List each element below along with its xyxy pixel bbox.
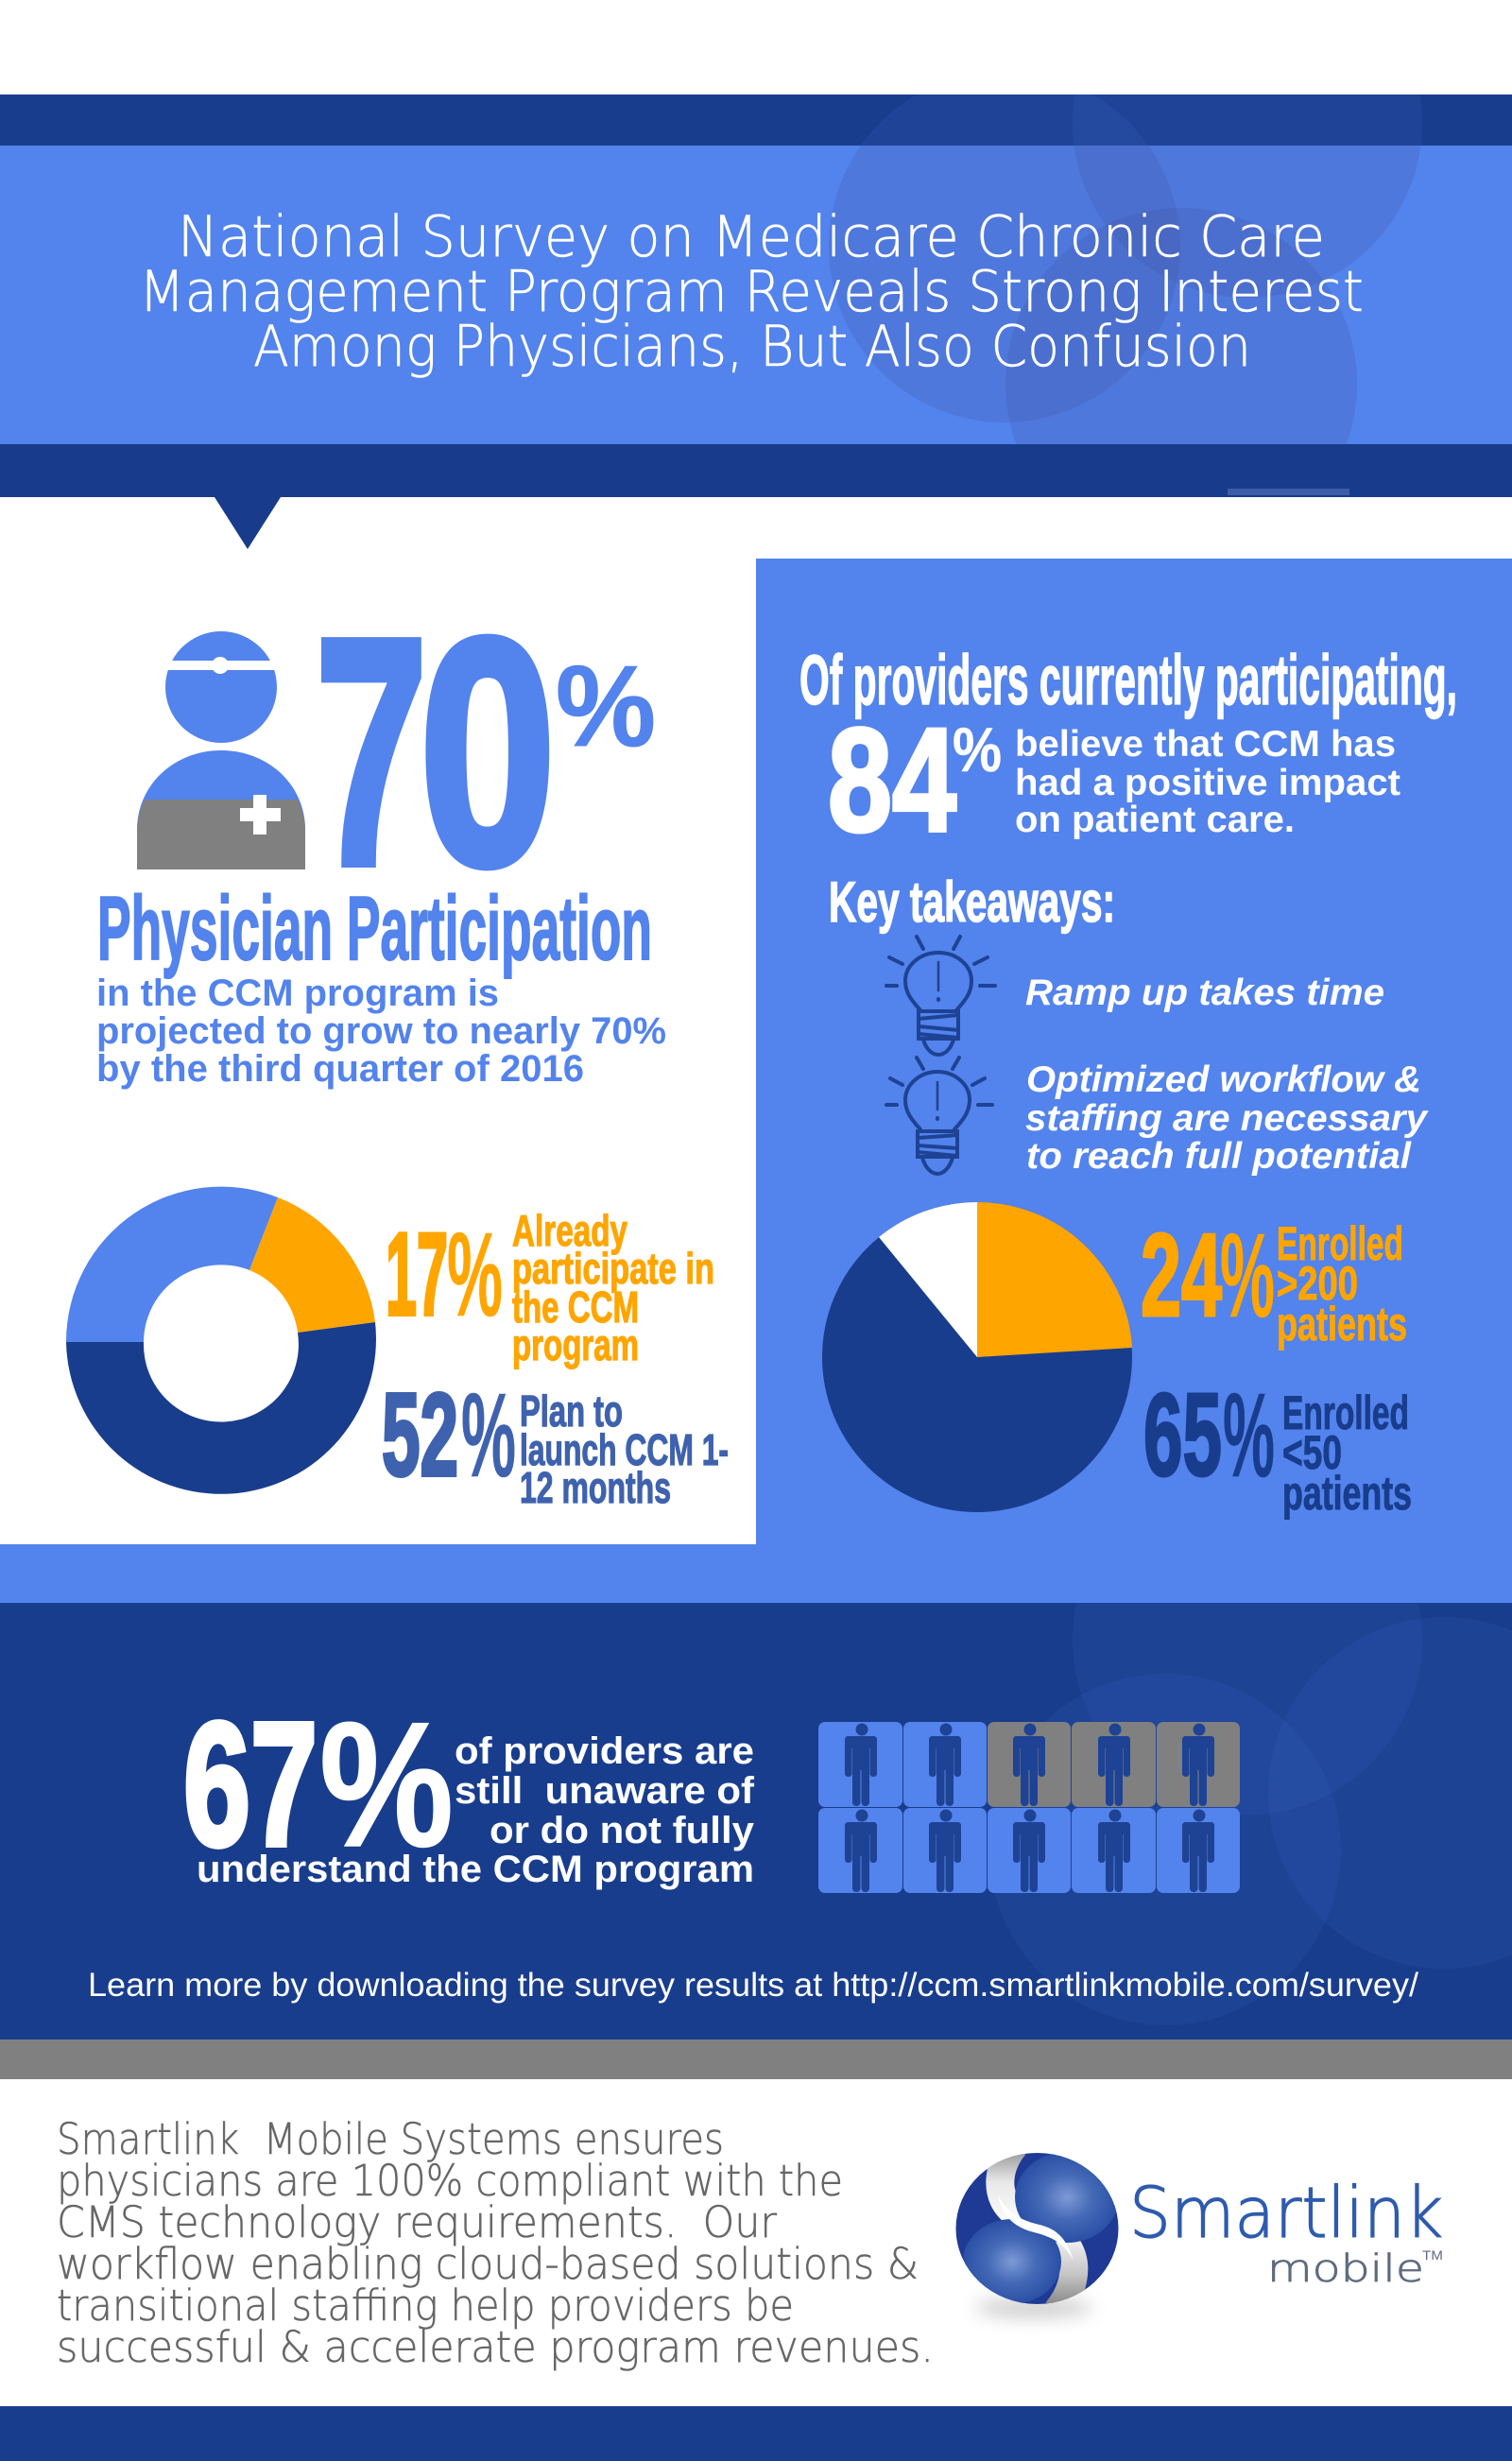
light blue strip (0, 1544, 1512, 1603)
big number 70%: % (556, 642, 656, 770)
stat: 24% enrolled over 200: patients (1277, 1298, 1407, 1351)
logo: smartlink mobile: Smartlink (1129, 2173, 1443, 2254)
stat: 24% enrolled over 200: Enrolled (1277, 1217, 1403, 1270)
stat: 52% plan to launch: 52 (382, 1370, 458, 1501)
text: optimized workflow: staffing are necessary (1025, 1098, 1429, 1139)
stat: 17% already participate: the CCM (512, 1282, 639, 1332)
stat: 24% enrolled over 200 (1141, 1209, 1407, 1351)
stat: 24% enrolled over 200: 24 (1141, 1211, 1222, 1341)
title: Among Physicians, But Also Confusion (253, 314, 1251, 380)
big number 70% (316, 573, 656, 932)
text block: unaware: still unaware of (455, 1770, 755, 1812)
text: optimized workflow (1025, 1059, 1429, 1177)
big number 70%: 0 (420, 573, 556, 932)
text block: smartlink description: physicians are 100% compliant with the (57, 2156, 843, 2206)
stat: 52% plan to launch: Plan to (520, 1386, 623, 1436)
text block: smartlink description: Smartlink Mobile Systems ensures (57, 2114, 724, 2164)
text block: smartlink description (57, 2114, 934, 2372)
chart: enrollment pie (822, 1202, 1132, 1512)
stat: 84%: % (953, 714, 1002, 784)
icon: light bulb 2 (886, 1058, 992, 1174)
text block: positive impact: believe that CCM has (1015, 724, 1396, 765)
text block: unaware: of providers are (455, 1730, 754, 1772)
text block: smartlink description: successful & accelerate program revenues. (57, 2322, 934, 2372)
panel: physician participation (66, 573, 729, 1512)
logo: smartlink mobile: mobile (1267, 2247, 1424, 2291)
text: optimized workflow: Optimized workflow & (1026, 1059, 1421, 1100)
chart: participation donut (66, 1187, 376, 1494)
pointer arrow (215, 497, 281, 549)
stat: 24% enrolled over 200: >200 (1277, 1257, 1358, 1310)
text block: positive impact: on patient care. (1015, 800, 1295, 840)
title (139, 204, 1364, 380)
logo: smartlink mobile: TM (1422, 2247, 1443, 2263)
stat: 17% already participate: participate in (512, 1244, 714, 1293)
footer band (0, 2406, 1512, 2461)
stat: 52% plan to launch: 12 months (520, 1463, 671, 1512)
text block: smartlink description: transitional staffing help providers be (57, 2280, 794, 2331)
heading: physician participation: Physician Participation (97, 878, 652, 979)
panel: awareness (0, 1603, 1512, 2039)
text: optimized workflow: to reach full potential (1026, 1136, 1412, 1177)
stat: 65% enrolled under 50: <50 (1282, 1426, 1342, 1479)
text block: projection: by the third quarter of 2016 (96, 1048, 584, 1090)
text block: positive impact: had a positive impact (1015, 763, 1400, 803)
big number 70%: 7 (316, 573, 427, 932)
stat: 65% enrolled under 50: 65 (1143, 1370, 1222, 1501)
stat: 65% enrolled under 50: Enrolled (1282, 1386, 1409, 1439)
text block: projection (96, 972, 666, 1090)
stat: 52% plan to launch: launch CCM 1- (520, 1425, 729, 1474)
stat: 52% plan to launch (382, 1368, 729, 1512)
text block: unaware: or do not fully (490, 1810, 755, 1851)
pictogram: ten people (818, 1722, 1240, 1893)
title: Management Program Reveals Strong Interest (139, 259, 1364, 325)
stat: 84%: 84 (828, 698, 956, 863)
text block: projection: in the CCM program is (96, 972, 499, 1014)
panel: current providers (756, 559, 1512, 1544)
gray divider band (0, 2039, 1512, 2079)
text block: unaware (197, 1730, 755, 1890)
text: ramp up takes time: Ramp up takes time (1025, 972, 1384, 1013)
logo: smartlink mobile (956, 2145, 1443, 2318)
header band (0, 95, 1512, 497)
stat: 17% already participate: program (512, 1320, 639, 1369)
stat: 65% enrolled under 50: patients (1282, 1467, 1412, 1520)
stat: 67%: % (319, 1685, 454, 1884)
text block: projection: projected to grow to nearly 70% (96, 1010, 666, 1052)
text block: unaware: understand the CCM program (197, 1849, 754, 1890)
text block: smartlink description: CMS technology requirements. Our (57, 2197, 777, 2247)
title: National Survey on Medicare Chronic Care (178, 204, 1325, 270)
stat: 52% plan to launch: % (461, 1368, 516, 1502)
stat: 17% already participate (386, 1206, 714, 1369)
stat: 67%: 67 (183, 1687, 318, 1883)
stat: 65% enrolled under 50 (1143, 1368, 1412, 1520)
heading: key takeaways: Key takeaways: (829, 870, 1115, 934)
stat: 24% enrolled over 200: % (1220, 1209, 1275, 1342)
icon: doctor (137, 631, 305, 869)
icon: light bulb 1 (886, 937, 995, 1055)
text: learn more: Learn more by downloading the survey results at http://ccm.smartlinkmobile.com/survey/ (88, 1967, 1418, 2004)
stat: 17% already participate: 17 (386, 1210, 448, 1340)
text block: positive impact (1015, 724, 1400, 840)
text block: smartlink description: workflow enabling cloud-based solutions & (57, 2239, 919, 2289)
stat: 17% already participate: Already (512, 1206, 627, 1255)
stat: 65% enrolled under 50: % (1223, 1368, 1275, 1502)
stat: 17% already participate: % (447, 1208, 503, 1341)
